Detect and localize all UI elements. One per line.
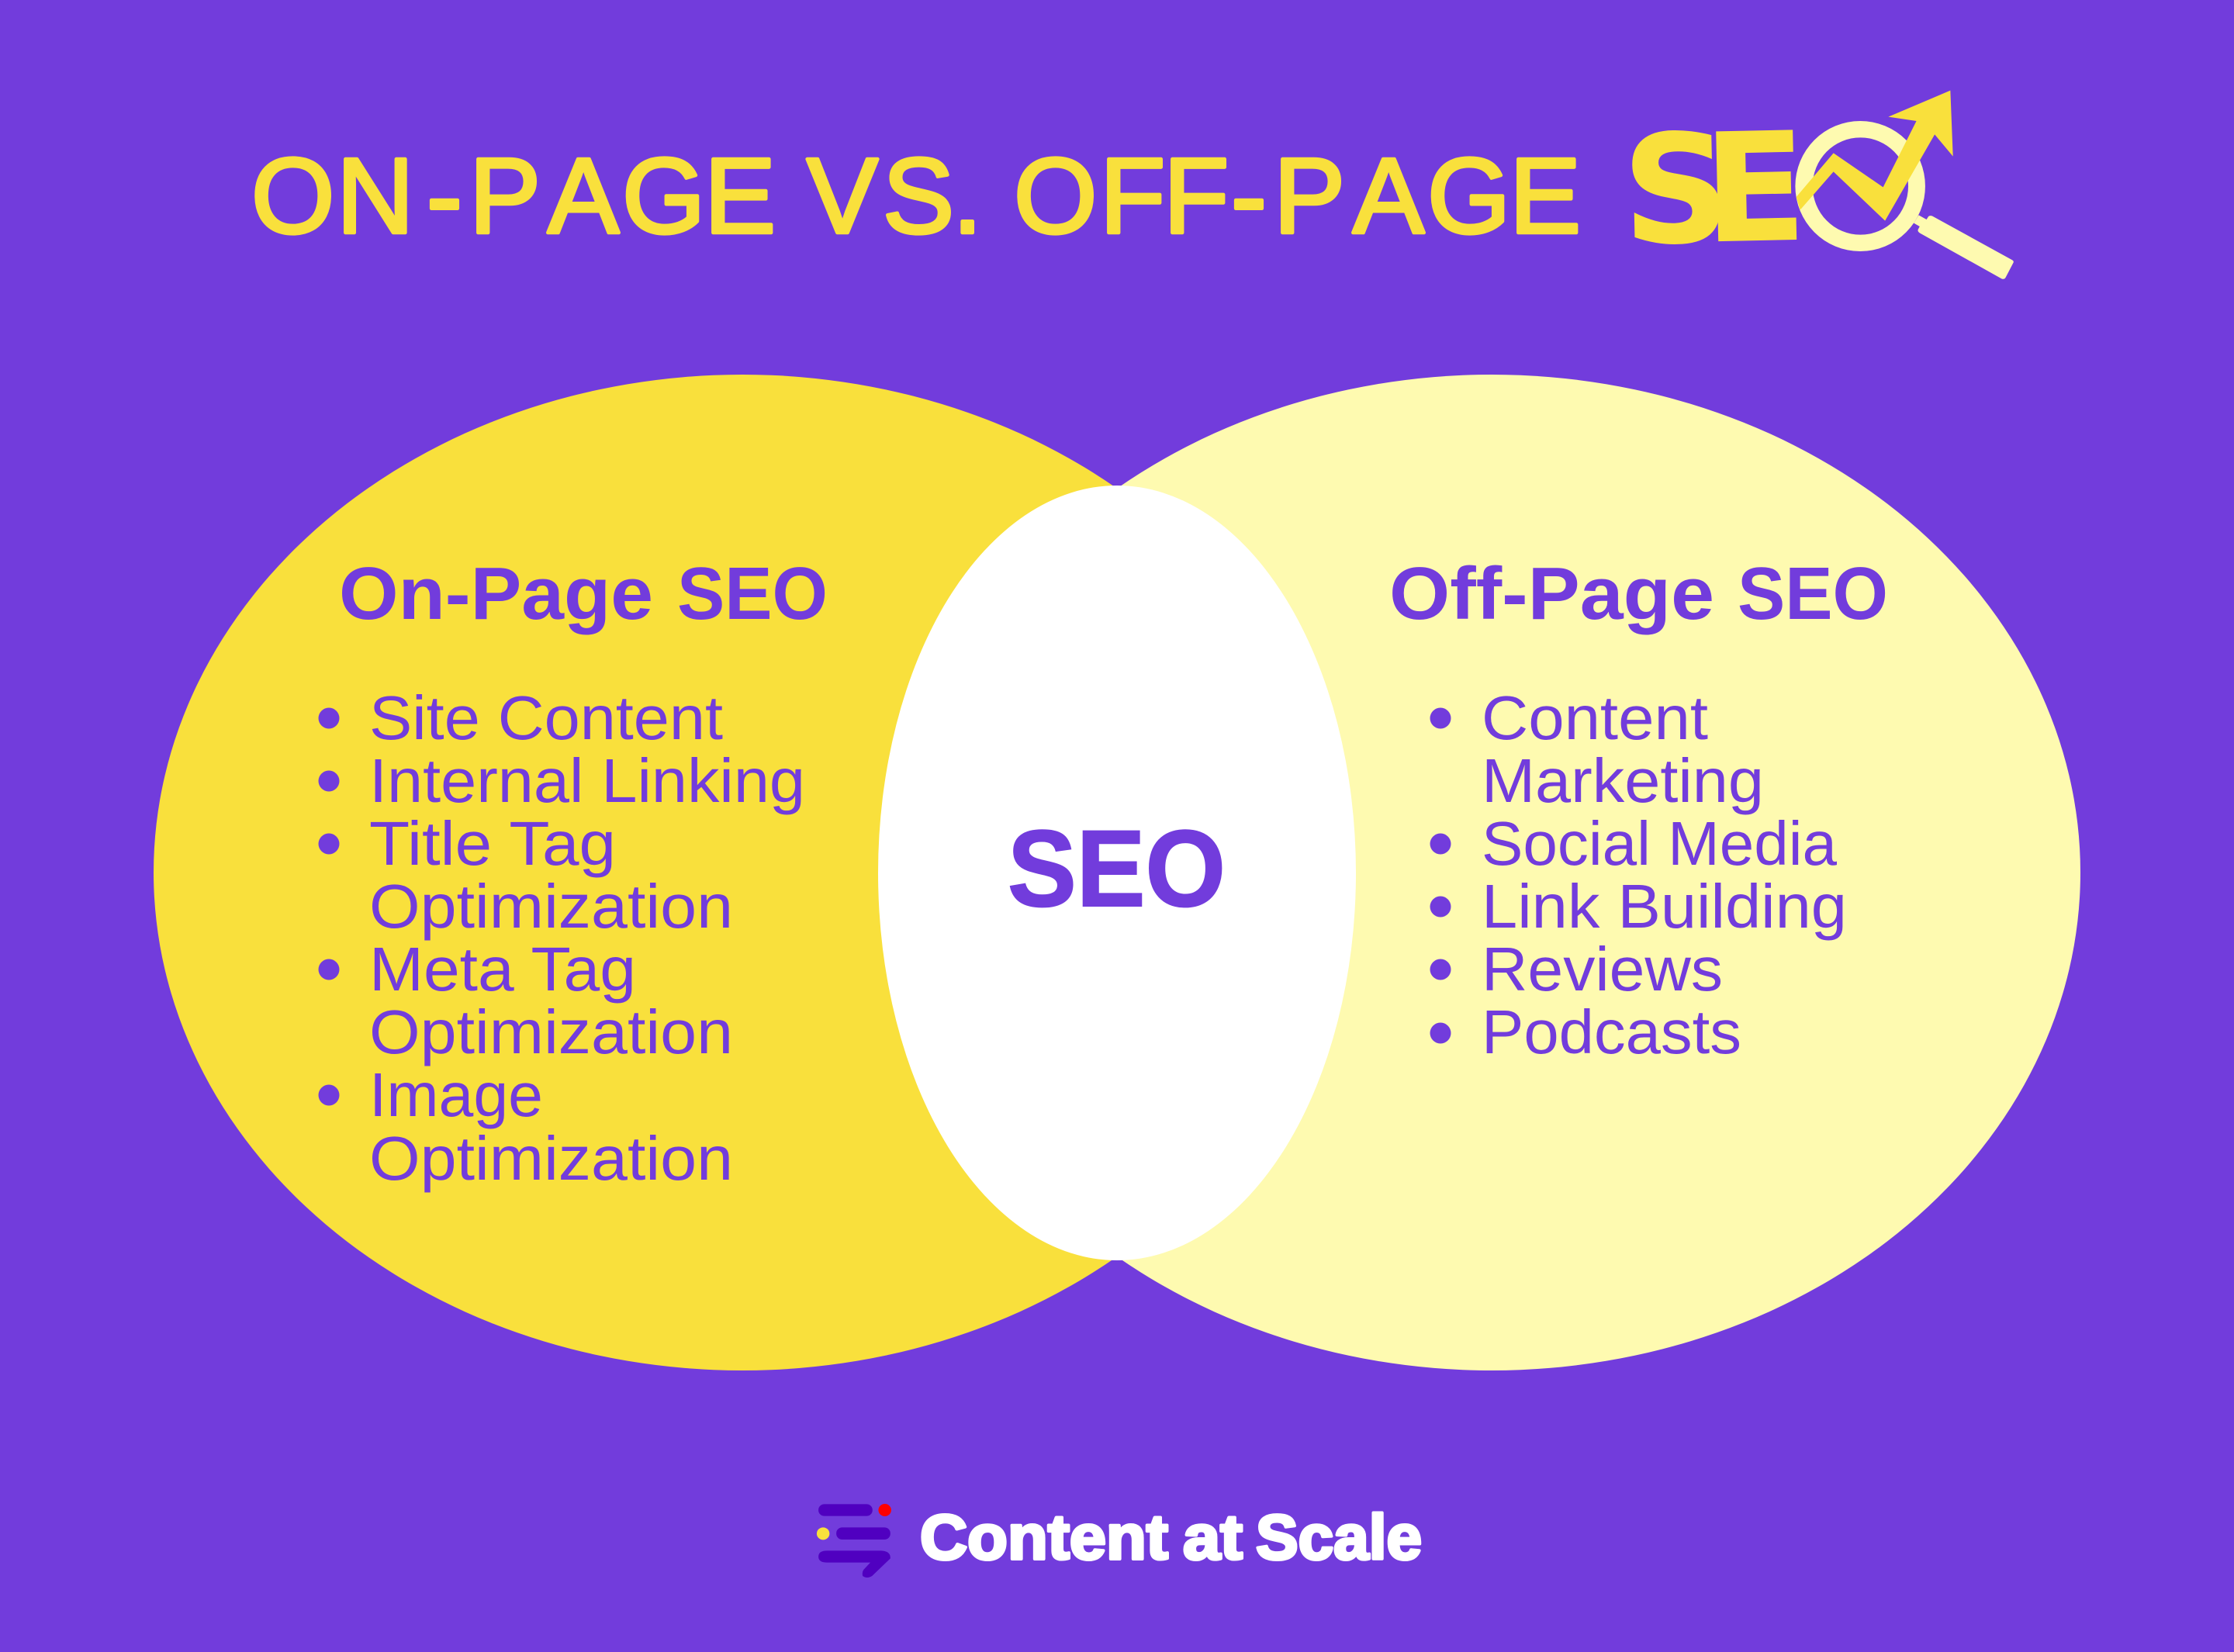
icon: SEO logo with magnifier and arrow <box>1620 91 2014 279</box>
list: on-page items: Optimization <box>369 872 733 941</box>
list: on-page items: Title Tag <box>369 809 616 878</box>
list: on-page items: Meta Tag <box>369 935 636 1004</box>
list: off-page items: Marketing <box>1482 746 1764 815</box>
list: off-page items: Link Building <box>1482 872 1847 941</box>
list: off-page items: Social Media <box>1482 809 1837 878</box>
icon: logo mark <box>817 1504 891 1578</box>
logo wordmark <box>920 1502 1422 1573</box>
heading: on-page: On-Page <box>339 552 653 635</box>
heading: off-page <box>1389 552 1888 635</box>
list: on-page items <box>318 683 805 1193</box>
logo wordmark: Content <box>920 1502 1168 1573</box>
heading: off-page: SEO <box>1738 552 1888 635</box>
list: off-page items: Podcasts <box>1482 997 1741 1066</box>
list: off-page items: Reviews <box>1482 935 1723 1004</box>
logo wordmark: Scale <box>1256 1502 1422 1573</box>
icon: SEO logo with magnifier and arrow: SE <box>1620 100 1808 278</box>
list: on-page items: Optimization <box>369 997 733 1066</box>
heading: on-page: SEO <box>677 552 828 635</box>
logo wordmark: at <box>1183 1502 1243 1573</box>
panel: SEO overlap <box>878 486 1356 1260</box>
list: on-page items: Image <box>369 1060 543 1129</box>
panel: on-page circle <box>154 375 1331 1370</box>
list: on-page items: Optimization <box>369 1124 733 1193</box>
footer logo: Content at Scale <box>817 1502 1422 1578</box>
list: off-page items: Content <box>1482 683 1708 752</box>
title: ON-PAGE VS. OFF-PAGE <box>251 137 1581 256</box>
heading: on-page <box>339 552 828 635</box>
list: off-page items <box>1430 683 1847 1066</box>
list: on-page items: Site Content <box>369 683 723 752</box>
overlap label: SEO <box>1008 807 1226 929</box>
heading: off-page: Off-Page <box>1389 552 1714 635</box>
list: on-page items: Internal Linking <box>369 746 805 815</box>
panel: off-page circle <box>903 375 2080 1370</box>
